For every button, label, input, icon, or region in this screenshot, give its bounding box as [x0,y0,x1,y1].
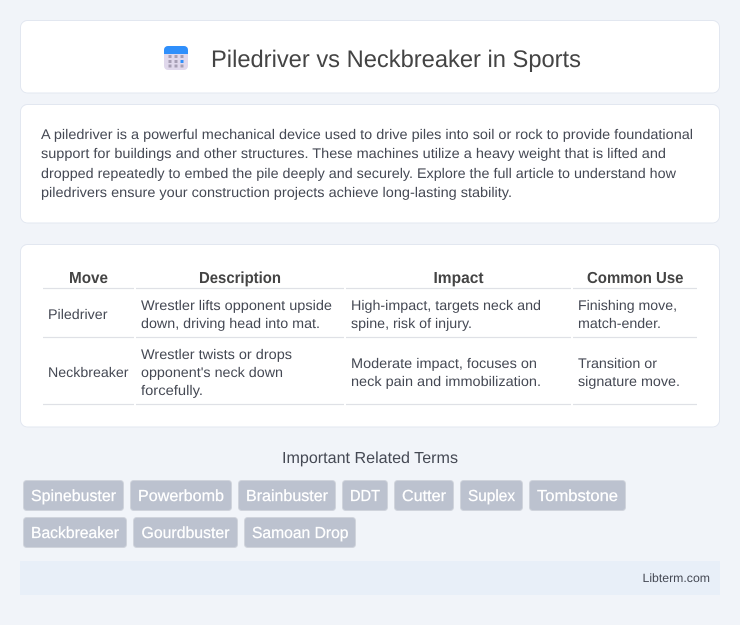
table row: neckbreaker: Wrestler twists or drops [141,346,292,362]
related term tags: Brainbuster [246,488,329,505]
table row: neckbreaker: signature move. [578,373,680,389]
table row: piledriver: Wrestler lifts opponent upside [141,297,332,313]
footer: Libterm.com [642,571,710,585]
related term tags: Powerbomb [138,488,224,505]
intro paragraph: piledrivers ensure your construction projects achieve long-lasting stability. [41,184,512,200]
table header row: Description [199,270,281,287]
panel: title header [20,20,720,93]
intro paragraph: dropped repeatedly to embed the pile deeply and securely. Explore the full article to understand how [41,165,677,181]
table row: neckbreaker [48,346,680,398]
table row: piledriver: match-ender. [578,315,661,331]
related term tags: Spinebuster [31,488,117,505]
table row: neckbreaker: forcefully. [141,382,203,398]
table row: neckbreaker: Transition or [578,355,657,371]
intro paragraph [41,126,693,200]
table row: piledriver: spine, risk of injury. [351,315,472,331]
table row: neckbreaker: Neckbreaker [48,364,129,380]
footer [20,561,720,595]
icon: calendar [164,46,188,70]
title: Piledriver vs Neckbreaker in Sports [211,46,581,73]
table header row [69,270,684,287]
table row: piledriver [48,297,677,331]
related term tags: Gourdbuster [142,525,230,542]
heading: important related terms: Important Related Terms [282,450,458,467]
intro paragraph: support for buildings and other structures. These machines utilize a heavy weight that is lifted and [41,145,666,161]
table row: piledriver: down, driving head into mat. [141,315,320,331]
table header row: Move [69,270,108,287]
related term tags: Samoan Drop [252,525,349,542]
table row: piledriver: High-impact, targets neck and [351,297,541,313]
related term tags: DDT [350,488,380,505]
table row: neckbreaker: neck pain and immobilization. [351,373,541,389]
intro paragraph: A piledriver is a powerful mechanical device used to drive piles into soil or rock to provide foundational [41,126,693,142]
related term tags: Cutter [402,488,447,505]
related term tags: Tombstone [537,488,618,505]
related term tags [24,480,626,548]
table row: neckbreaker: Moderate impact, focuses on [351,355,537,371]
table row: piledriver: Finishing move, [578,297,677,313]
panel: comparison table [20,244,720,427]
table header row: Common Use [587,270,684,287]
related term tags: Suplex [468,488,515,505]
table row: neckbreaker: opponent's neck down [141,364,283,380]
related term tags: Backbreaker [31,525,120,542]
table row: piledriver: Piledriver [48,306,108,322]
table header row: Impact [434,270,484,287]
panel: introduction [20,104,720,223]
